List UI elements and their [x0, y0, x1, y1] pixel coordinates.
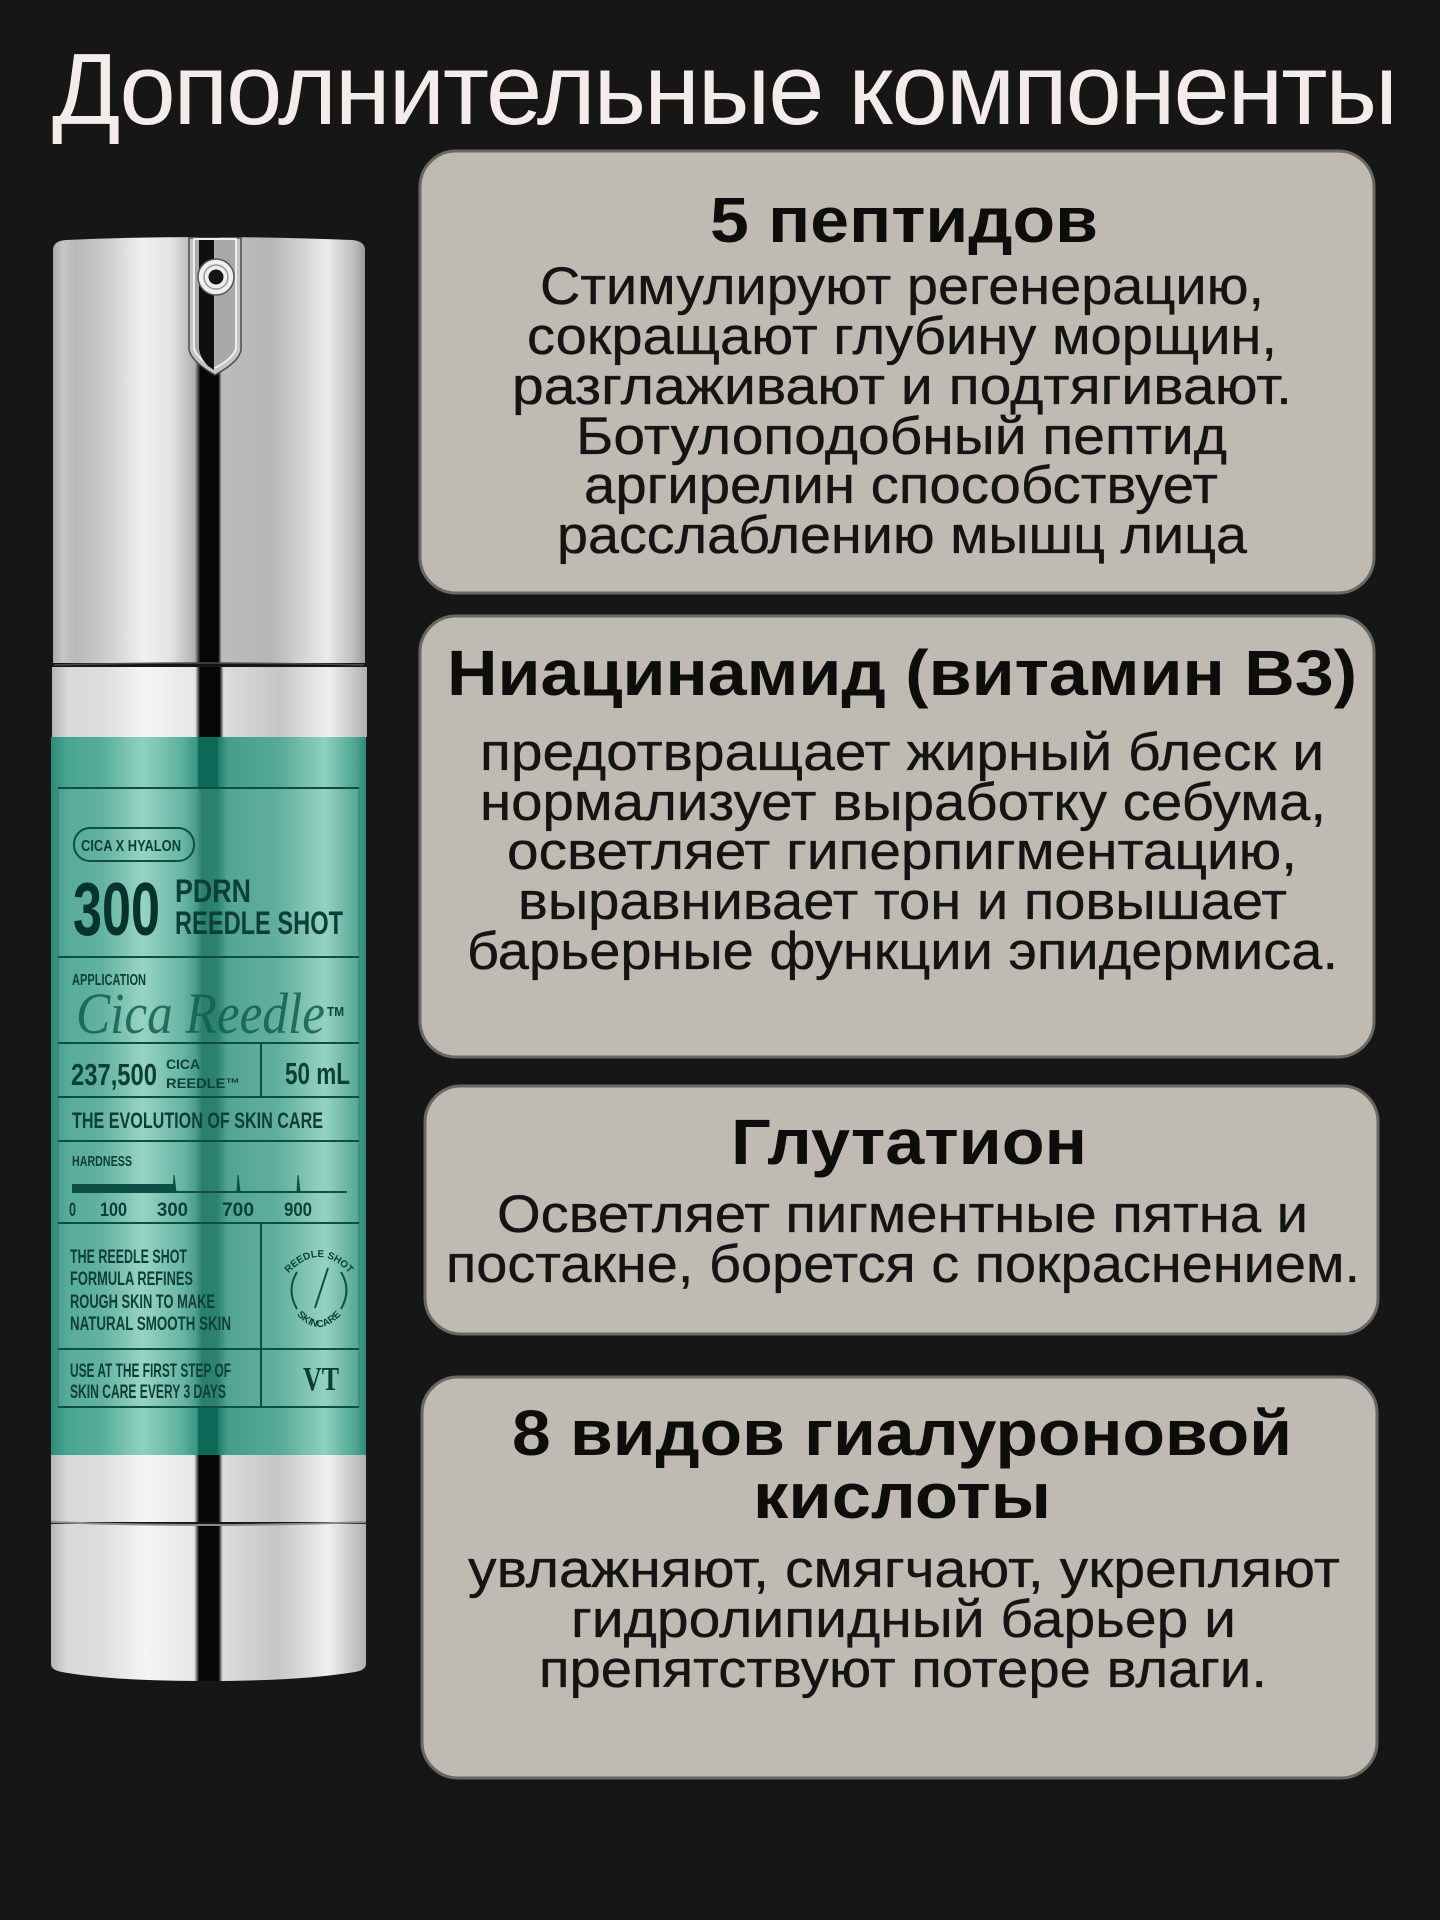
dark stripe on teal bands [198, 737, 218, 1455]
heading: hyaluronic acid: кислоты [753, 1460, 1051, 1532]
body text: peptides: Ботулоподобный пептид [576, 407, 1227, 466]
label count and volume: 237,500 [71, 1057, 157, 1092]
body text: niacinamide: осветляет гиперпигментацию, [507, 822, 1297, 881]
label usage [70, 1361, 231, 1403]
body text: niacinamide [467, 723, 1338, 981]
body text: peptides [512, 257, 1292, 565]
label application: TM [327, 1004, 344, 1019]
body text: glutathione: постакне, борется с покраснением. [446, 1235, 1360, 1294]
label count and volume: 50 mL [285, 1056, 350, 1091]
label description: NATURAL SMOOTH SKIN [70, 1314, 231, 1335]
label description: FORMULA REFINES [70, 1269, 193, 1290]
body text: peptides: аргирелин способствует [584, 456, 1218, 515]
heading: niacinamide: Ниацинамид (витамин В3) [447, 637, 1357, 709]
panel: niacinamide [420, 616, 1374, 1057]
label product name: PDRN [175, 873, 251, 909]
label product name [73, 867, 343, 951]
label count and volume [71, 1056, 350, 1092]
label product name: 300 [73, 867, 160, 951]
label frame lines [58, 788, 359, 1407]
label count and volume: CICA [166, 1056, 200, 1072]
label description [70, 1247, 231, 1335]
body text: peptides: сокращают глубину морщин, [527, 307, 1277, 366]
label product name: REEDLE SHOT [175, 905, 343, 941]
heading: hyaluronic acid [512, 1397, 1292, 1532]
bottle neck [52, 667, 367, 737]
body text: hyaluronic acid [468, 1540, 1340, 1699]
label usage: SKIN CARE EVERY 3 DAYS [70, 1382, 226, 1403]
label hardness scale [69, 1153, 347, 1221]
label round seal [284, 1250, 354, 1328]
label description: ROUGH SKIN TO MAKE [70, 1292, 215, 1313]
label application: Cica Reedle [76, 981, 325, 1046]
body text: hyaluronic acid: препятствуют потере влаги. [539, 1640, 1267, 1699]
label count and volume: REEDLE™ [166, 1075, 240, 1091]
teal label band [51, 737, 366, 1455]
label application: APPLICATION [72, 972, 146, 989]
body text: peptides: Стимулируют регенерацию, [540, 257, 1264, 316]
cap seam [54, 663, 364, 665]
pump nozzle [189, 238, 241, 375]
label panel tint [58, 789, 359, 1407]
label hardness scale: HARDNESS [72, 1153, 132, 1170]
body text: niacinamide: барьерные функции эпидермиса. [467, 922, 1338, 981]
product image: VT PDRN reedle shot bottle [51, 237, 367, 1681]
label hardness scale: 0 [69, 1200, 76, 1221]
body text: peptides: расслаблению мышц лица [557, 506, 1248, 565]
heading: glutathione: Глутатион [731, 1106, 1087, 1178]
panel: glutathione [425, 1086, 1378, 1334]
label hardness scale: 700 [222, 1200, 254, 1221]
body text: hyaluronic acid: гидролипидный барьер и [571, 1590, 1236, 1649]
label pill: cica x hyalon [74, 828, 194, 861]
label brand VT: VT [303, 1361, 339, 1398]
label pill: cica x hyalon: CICA X HYALON [81, 838, 181, 855]
body text: glutathione: Осветляет пигментные пятна и [497, 1185, 1308, 1244]
label usage: USE AT THE FIRST STEP OF [70, 1361, 231, 1382]
body text: niacinamide: предотвращает жирный блеск и [480, 723, 1324, 782]
panel: hyaluronic acid [422, 1377, 1377, 1778]
label hardness scale: 300 [157, 1200, 188, 1221]
label tagline: THE EVOLUTION OF SKIN CARE [72, 1108, 323, 1133]
body text: peptides: разглаживают и подтягивают. [512, 357, 1292, 416]
panel: 5 peptides [420, 151, 1374, 593]
bottle cap [53, 237, 365, 663]
label round seal: SKINCARE [298, 1310, 341, 1328]
bottle base [51, 1524, 366, 1681]
label round seal: REEDLE SHOT [284, 1250, 354, 1273]
label hardness scale: 900 [284, 1200, 312, 1221]
heading: 5 peptides: 5 пептидов [710, 184, 1098, 256]
label hardness scale: 100 [100, 1200, 127, 1221]
label description: THE REEDLE SHOT [70, 1247, 187, 1268]
body text: niacinamide: выравнивает тон и повышает [518, 872, 1287, 931]
title: Дополнительные компоненты [52, 34, 1398, 146]
lower white section [51, 1455, 366, 1522]
heading: hyaluronic acid: 8 видов гиалуроновой [512, 1397, 1292, 1469]
body text: niacinamide: нормализует выработку себума, [480, 773, 1326, 832]
body text: glutathione [446, 1185, 1360, 1294]
body text: hyaluronic acid: увлажняют, смягчают, укрепляют [468, 1540, 1340, 1599]
